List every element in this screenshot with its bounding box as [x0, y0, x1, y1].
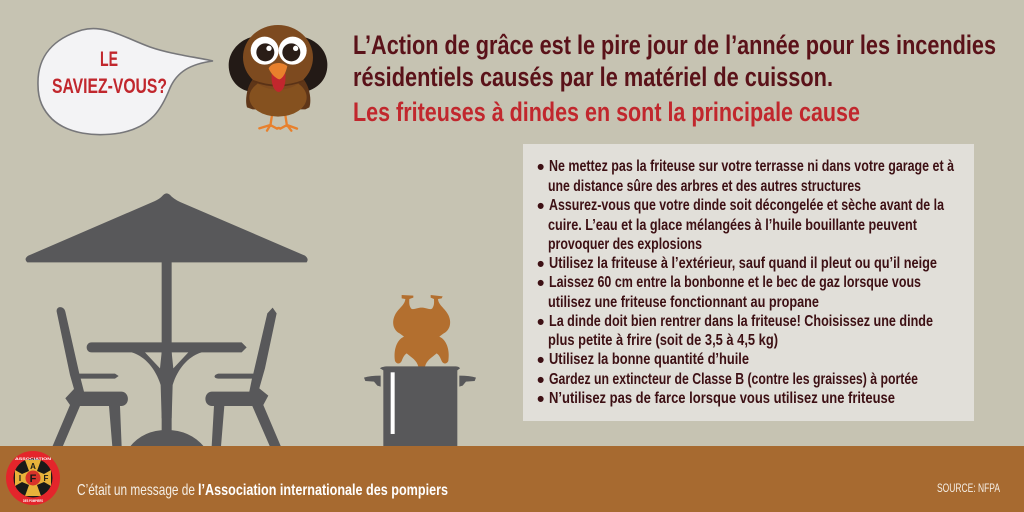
tips list: provoquer des explosions [548, 236, 702, 253]
tips list: • [537, 388, 544, 411]
bubble text: SAVIEZ-VOUS? [52, 75, 167, 98]
panel: safety tips [523, 144, 974, 421]
table base [130, 430, 204, 447]
title: résidentiels causés par le matériel de cuisson. [353, 62, 833, 92]
tips list [537, 156, 954, 411]
logo: firefighters association: F [30, 473, 37, 485]
turkey eyes [251, 37, 279, 65]
table [87, 342, 247, 418]
umbrella pole [162, 262, 172, 432]
raw turkey [393, 295, 450, 367]
bubble text: LE [100, 48, 118, 71]
pot [380, 366, 460, 447]
tips list: • [537, 156, 544, 179]
tips list: • [537, 369, 544, 392]
tips list: • [537, 253, 544, 276]
source: SOURCE: NFPA [937, 481, 1000, 495]
turkey tail feathers [229, 37, 327, 92]
tips list: Laissez 60 cm entre la bonbonne et le bec de gaz lorsque vous [549, 274, 921, 291]
tips list: utilisez une friteuse fonctionnant au propane [548, 294, 819, 311]
tips list: Gardez un extincteur de Classe B (contre les graisses) à portée [549, 371, 918, 388]
tips list: Utilisez la bonne quantité d’huile [549, 351, 749, 368]
logo cross [15, 460, 51, 496]
speech bubble [38, 29, 213, 135]
umbrella [26, 193, 308, 262]
logo centre [26, 470, 40, 486]
turkey wings [246, 78, 310, 109]
turkey collar [253, 81, 304, 86]
pot highlight [391, 372, 395, 434]
title: Les friteuses à dindes en sont la principale cause [353, 97, 860, 127]
logo letters: I [19, 474, 21, 483]
logo letters [19, 462, 49, 483]
footer message organisation: l’Association internationale des pompiers [198, 482, 448, 499]
logo ring text [15, 456, 51, 503]
footer band [0, 446, 1024, 512]
turkey head [243, 25, 313, 90]
logo letters: F [44, 474, 49, 483]
turkey legs and feet [259, 115, 297, 131]
tips list: • [537, 195, 544, 218]
icon: fryer pot with turkey [364, 295, 476, 447]
pot handles [364, 376, 476, 387]
logo ring text: ASSOCIATION [15, 456, 51, 461]
turkey body [249, 78, 307, 117]
tips list: Utilisez la friteuse à l’extérieur, sauf quand il pleut ou qu’il neige [549, 255, 937, 272]
tips list: • [537, 311, 544, 334]
tips list: plus petite à frire (soit de 3,5 à 4,5 kg) [548, 332, 778, 349]
turkey beak [269, 63, 287, 79]
icon: turkey [229, 25, 327, 131]
icon: patio umbrella, table and chairs [26, 193, 308, 447]
logo letters: A [30, 462, 36, 471]
tips list: La dinde doit bien rentrer dans la friteuse! Choisissez une dinde [549, 313, 933, 330]
tips list: une distance sûre des arbres et des autres structures [548, 178, 861, 195]
bubble text [52, 48, 167, 98]
tips list: cuire. L’eau et la glace mélangées à l’huile bouillante peuvent [548, 217, 918, 234]
logo: firefighters association [6, 451, 60, 505]
tips list: • [537, 349, 544, 372]
footer message: C’était un message de [77, 482, 195, 499]
title [353, 30, 996, 127]
turkey wattle [272, 73, 285, 92]
right chair [205, 308, 281, 447]
tips list: N’utilisez pas de farce lorsque vous utilisez une friteuse [549, 390, 895, 407]
logo ring text: DES POMPIERS [23, 498, 43, 503]
left chair [52, 307, 128, 447]
tips list: • [537, 272, 544, 295]
